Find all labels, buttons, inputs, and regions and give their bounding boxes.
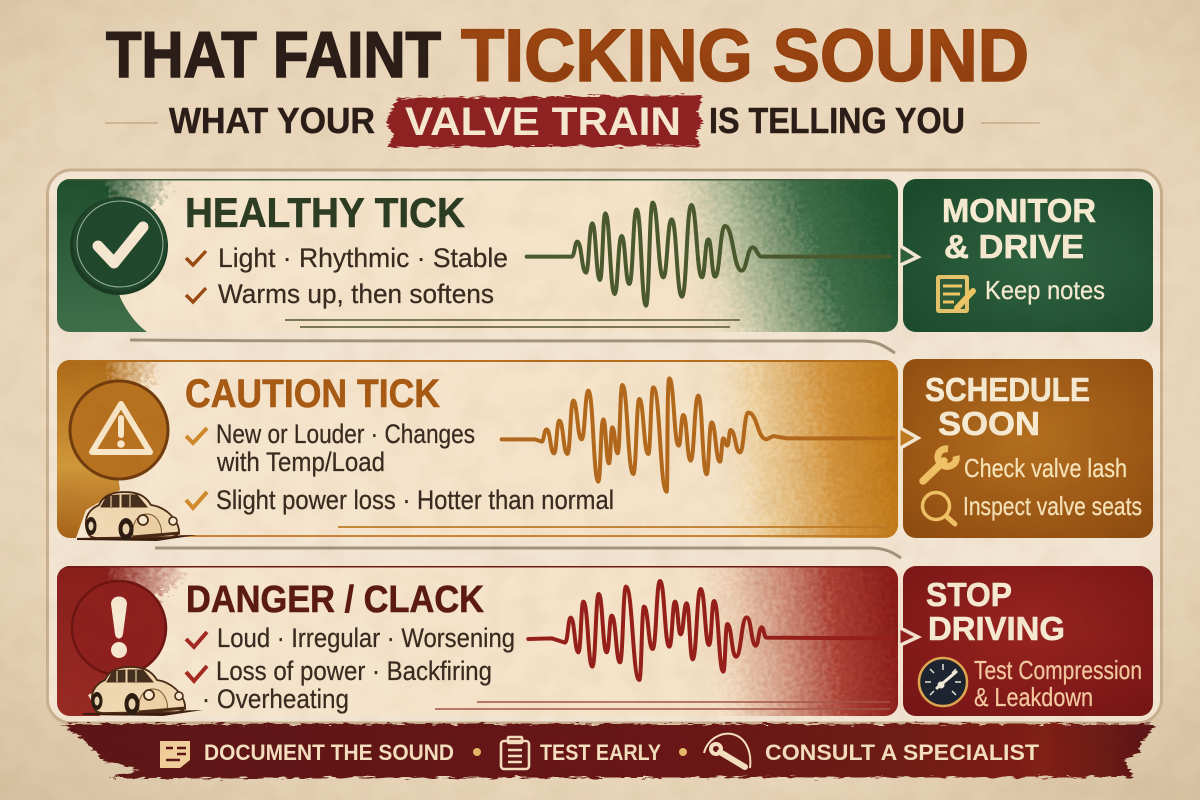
bullet list: with Temp/Load — [216, 447, 385, 477]
panel: schedule soon: SOON — [938, 405, 1040, 442]
icon: notes — [936, 275, 973, 313]
tip: document: DOCUMENT THE SOUND — [204, 740, 454, 765]
title: highlighted words: TICKING SOUND — [461, 14, 1029, 97]
bullet list — [186, 243, 508, 309]
heading: HEALTHY TICK — [185, 189, 465, 236]
waveform — [527, 203, 890, 306]
icon: car — [83, 667, 203, 716]
icon: wrench and arc — [704, 734, 750, 768]
bullet list: Light · Rhythmic · Stable — [218, 243, 508, 273]
action detail: & Leakdown — [974, 682, 1093, 712]
heading: CAUTION TICK — [185, 372, 440, 416]
action detail: Keep notes — [985, 275, 1105, 305]
action detail: Test Compression — [974, 655, 1142, 685]
icon: warning badge — [70, 381, 168, 479]
action detail: Check valve lash — [964, 453, 1127, 483]
brush strip — [61, 724, 1154, 778]
panel: danger clack — [57, 566, 898, 716]
icon: clipboard — [501, 737, 529, 769]
bullet list: Loss of power · Backfiring — [216, 656, 492, 686]
icon: document — [160, 741, 190, 768]
separator dot — [679, 748, 687, 756]
title: dark words: THAT FAINT — [106, 18, 441, 91]
icon: wrench — [923, 449, 956, 481]
outer frame — [48, 170, 1162, 723]
bullet list: Loud · Irregular · Worsening — [217, 623, 515, 653]
bullet list — [186, 419, 614, 515]
panel: monitor and drive: & DRIVE — [944, 228, 1084, 265]
bullet list: Slight power loss · Hotter than normal — [216, 485, 614, 515]
bullet list: Warms up, then softens — [218, 279, 494, 309]
subtitle tail: IS TELLING YOU — [709, 100, 965, 141]
waveform — [528, 581, 890, 680]
panel: schedule soon — [900, 359, 1153, 538]
subtitle — [105, 95, 1040, 147]
tip: consult: CONSULT A SPECIALIST — [765, 740, 1040, 765]
action heading: SCHEDULE — [925, 371, 1090, 408]
action heading: STOP — [926, 576, 1012, 613]
subtitle lead: WHAT YOUR — [169, 100, 375, 141]
bullet list — [186, 623, 515, 714]
panel: monitor and drive — [900, 179, 1153, 332]
tip: test: TEST EARLY — [540, 740, 661, 765]
footer banner — [61, 724, 1154, 778]
icon: car — [77, 492, 197, 541]
action detail — [974, 655, 1142, 712]
connector arrow — [900, 566, 918, 716]
action heading: MONITOR — [942, 192, 1096, 229]
panel: caution tick — [57, 360, 898, 541]
waveform — [502, 378, 893, 492]
icon: check badge — [70, 197, 168, 295]
icon: danger badge — [72, 581, 166, 675]
connector arrow — [900, 179, 918, 332]
brush badge — [386, 95, 703, 147]
divider swoosh 2 — [155, 548, 901, 558]
bullet list: · Overheating — [202, 684, 349, 714]
connector arrow — [900, 359, 918, 538]
panel: stop driving: DRIVING — [928, 610, 1065, 647]
separator dot — [473, 748, 481, 756]
heading: DANGER / CLACK — [186, 579, 485, 621]
bullet list: New or Louder · Changes — [216, 419, 475, 449]
title — [106, 14, 1029, 97]
panel: stop driving — [900, 566, 1153, 716]
action detail: Inspect valve seats — [963, 491, 1142, 521]
divider swoosh 1 — [130, 340, 895, 353]
icon: magnifier — [922, 492, 955, 524]
panel: healthy tick — [57, 179, 898, 332]
icon: gauge — [919, 658, 967, 706]
badge label: VALVE TRAIN — [405, 100, 681, 144]
